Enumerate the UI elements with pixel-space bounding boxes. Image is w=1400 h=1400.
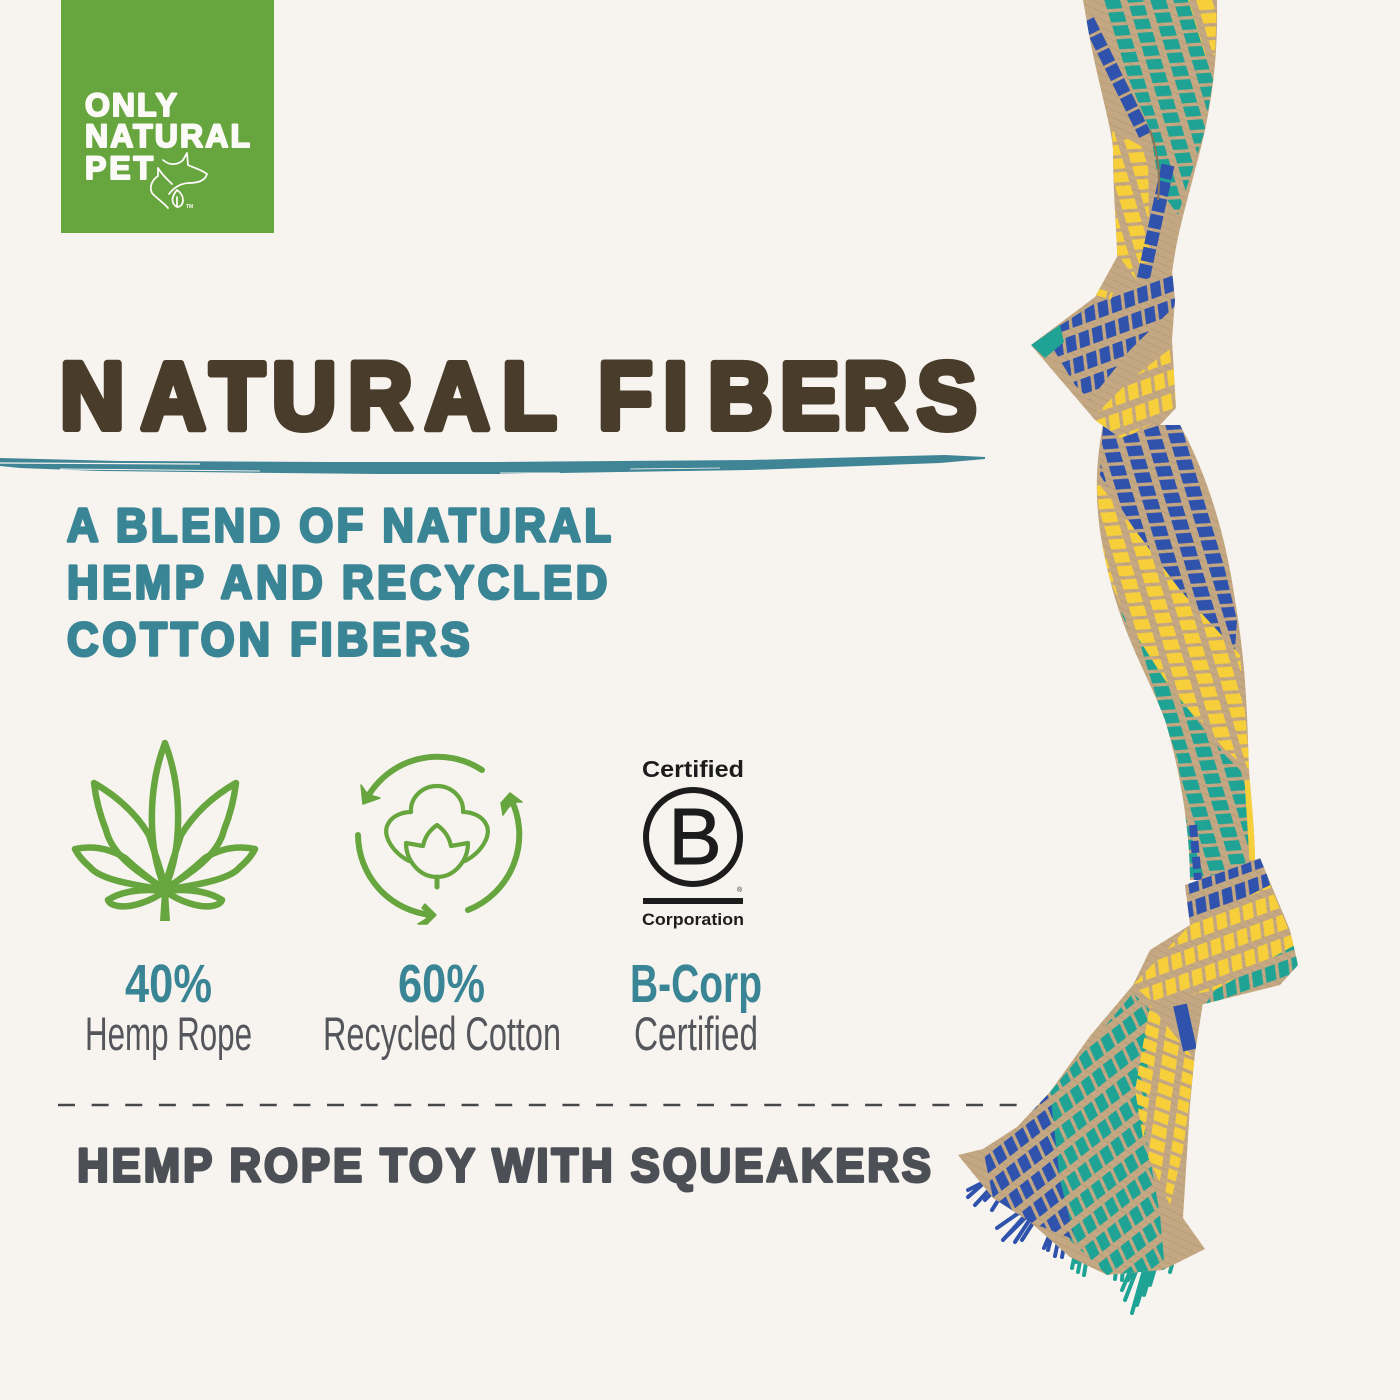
subtitle: A BLEND OF NATURAL bbox=[67, 499, 611, 552]
icon: B Corp certified badge: ® bbox=[737, 886, 743, 894]
stat: 60% recycled cotton bbox=[323, 954, 561, 1060]
product label: HEMP ROPE TOY WITH SQUEAKERS bbox=[77, 1139, 931, 1192]
icon: dog and cat outline: TM bbox=[186, 204, 193, 210]
logo wordmark: PET bbox=[85, 150, 153, 186]
rope knot: lower bbox=[1130, 855, 1300, 1010]
icon: hemp leaf bbox=[75, 743, 255, 921]
icon: dog and cat outline bbox=[151, 153, 207, 210]
stat: B-Corp certified bbox=[630, 954, 762, 1060]
stat: B-Corp certified: Certified bbox=[634, 1007, 758, 1060]
rope section: bottom fan bbox=[950, 985, 1210, 1280]
icon: B Corp certified badge: Corporation bbox=[642, 910, 744, 929]
logo wordmark: ONLY bbox=[85, 87, 177, 123]
recycle arrows bbox=[358, 757, 522, 924]
icon: recycled cotton bbox=[358, 757, 522, 924]
logo wordmark bbox=[85, 87, 250, 186]
subtitle bbox=[67, 499, 611, 666]
stat: 40% hemp rope: Hemp Rope bbox=[85, 1007, 252, 1060]
subtitle: COTTON FIBERS bbox=[67, 613, 470, 666]
icon: B Corp certified badge: Certified bbox=[642, 756, 744, 782]
stat: 60% recycled cotton: 60% bbox=[398, 954, 485, 1014]
stat: B-Corp certified: B-Corp bbox=[630, 954, 762, 1014]
title: NATURAL FIBERS bbox=[60, 343, 977, 449]
logo: Only Natural Pet bbox=[61, 0, 274, 233]
rope bottom fringes bbox=[968, 1160, 1172, 1313]
stat: 60% recycled cotton: Recycled Cotton bbox=[323, 1007, 561, 1060]
brush stroke underline bbox=[0, 455, 985, 474]
logo wordmark: NATURAL bbox=[85, 118, 250, 154]
rope section: middle bbox=[1096, 425, 1255, 880]
icon: B Corp certified badge: B bbox=[668, 792, 722, 881]
stat: 40% hemp rope bbox=[85, 954, 252, 1060]
rope section: top bbox=[1083, 0, 1218, 282]
product: hemp rope toy bbox=[950, 0, 1300, 1313]
rope knot: upper bbox=[1031, 255, 1176, 438]
icon: B Corp certified badge bbox=[642, 756, 744, 929]
cotton boll bbox=[386, 786, 488, 887]
stat: 40% hemp rope: 40% bbox=[125, 954, 212, 1014]
subtitle: HEMP AND RECYCLED bbox=[67, 556, 607, 609]
